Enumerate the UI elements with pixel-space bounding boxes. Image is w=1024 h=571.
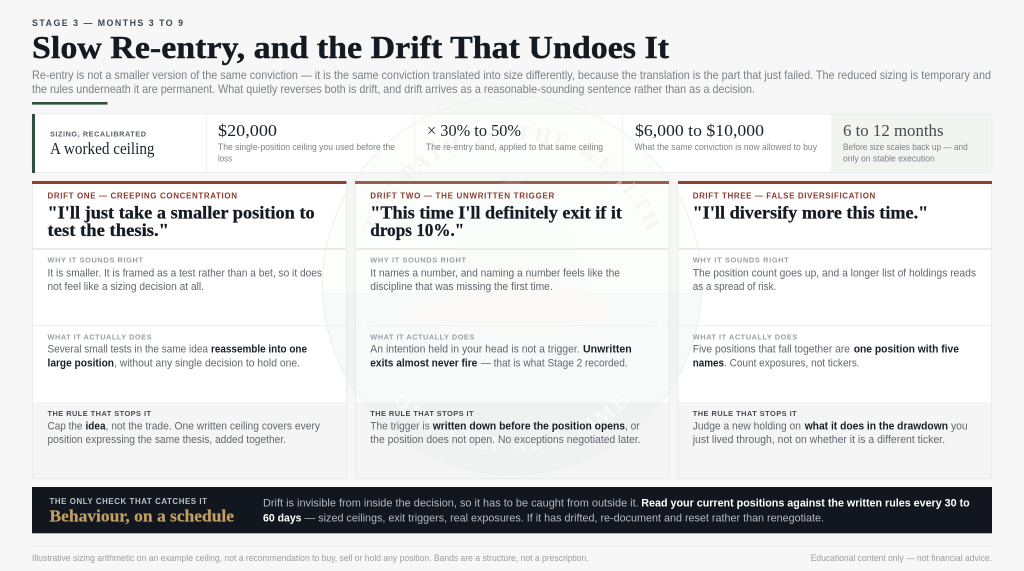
what it actually does: one position with five (854, 344, 959, 356)
the rule that stops it: what it does in the drawdown (804, 420, 948, 432)
watermark seal: ONE STEP AT A TIME (389, 387, 635, 457)
card quote: test the thesis." (48, 220, 169, 240)
panel: drift one (48, 192, 322, 446)
cell: duration: only on stable execution (843, 152, 935, 164)
cell: allowed size: What the same conviction is now allowed to buy (634, 141, 817, 152)
what it actually does: WHAT IT ACTUALLY DOES (370, 332, 474, 341)
card label: DRIFT TWO — THE UNWRITTEN TRIGGER (370, 192, 555, 201)
what it actually does (370, 332, 632, 370)
the rule that stops it (692, 409, 968, 446)
what it actually does: — that is what Stage 2 recorded. (481, 358, 628, 370)
cell: re-entry band (426, 121, 603, 152)
what it actually does: exits almost never fire (370, 358, 477, 370)
why it sounds right: The position count goes up, and a longer list of holdings reads (693, 268, 976, 280)
card quote: "I'll diversify more this time." (693, 203, 928, 223)
the rule that stops it: The trigger is (370, 420, 430, 432)
header (32, 18, 991, 96)
card quote: drops 10%." (370, 220, 464, 240)
why it sounds right: WHY IT SOUNDS RIGHT (693, 256, 789, 265)
callout text: Read your current positions against the written rules every 30 to (641, 498, 970, 510)
cell label: A worked ceiling (50, 139, 155, 158)
the rule that stops it: THE RULE THAT STOPS IT (48, 409, 151, 418)
cell: duration: 6 to 12 months (843, 121, 944, 140)
card quote (48, 203, 315, 240)
the rule that stops it: THE RULE THAT STOPS IT (370, 409, 474, 418)
why it sounds right (370, 256, 620, 293)
the rule that stops it: just lived through, not on whether it is a different ticker. (692, 434, 945, 446)
what it actually does: Several small tests in the same idea (48, 344, 209, 356)
educational note: Educational content only — not financial advice. (811, 553, 992, 563)
cell: prior ceiling (218, 121, 395, 164)
callout: behaviour on a schedule (32, 487, 992, 533)
panel: drift two (370, 192, 641, 446)
why it sounds right: WHY IT SOUNDS RIGHT (48, 256, 143, 265)
why it sounds right: It is smaller. It is framed as a test rather than a bet, so it does (48, 268, 322, 280)
card quote: "I'll just take a smaller position to (48, 203, 315, 223)
subtitle (32, 68, 991, 96)
disclaimer: Illustrative sizing arithmetic on an example ceiling, not a recommendation to buy, sell or hold any position. Bands are a structure, not a prescription. (32, 553, 589, 563)
what it actually does: large position (48, 358, 114, 370)
the rule that stops it (48, 409, 320, 446)
the rule that stops it: written down before the position opens (432, 420, 625, 432)
the rule that stops it: Judge a new holding on (693, 420, 801, 432)
cell: duration: Before size scales back up — and (843, 141, 968, 152)
watermark seal (322, 96, 702, 402)
panel: worked ceiling strip backgrounds (32, 114, 992, 173)
callout text: — sized ceilings, exit triggers, real exposures. If it has drifted, re-document and reset rather than renegotiate. (304, 513, 824, 525)
cell: allowed size (634, 121, 817, 152)
what it actually does: WHAT IT ACTUALLY DOES (693, 332, 797, 341)
why it sounds right: not feel like a sizing decision at all. (48, 281, 204, 293)
cell label (50, 130, 155, 158)
the rule that stops it: you (951, 420, 968, 432)
card label: DRIFT THREE — FALSE DIVERSIFICATION (693, 192, 876, 201)
why it sounds right (48, 256, 322, 293)
the rule that stops it: the position does not open. No exceptions negotiated later. (370, 434, 641, 446)
what it actually does: reassemble into one (211, 344, 307, 356)
callout heading (50, 497, 234, 525)
the rule that stops it: Cap the (48, 420, 82, 432)
panel: sizing, recalibrated (50, 121, 968, 164)
callout heading: Behaviour, on a schedule (50, 506, 234, 525)
cell: prior ceiling: loss (218, 152, 232, 164)
the rule that stops it: idea (86, 420, 106, 432)
footer (32, 553, 992, 563)
callout text (263, 498, 970, 525)
the rule that stops it: THE RULE THAT STOPS IT (693, 409, 797, 418)
what it actually does (693, 332, 959, 370)
cell: re-entry band: The re-entry band, applied to that same ceiling (426, 141, 603, 152)
the rule that stops it (370, 409, 641, 446)
the rule that stops it: , not the trade. One written ceiling covers every (106, 420, 320, 432)
what it actually does: , without any single decision to hold one. (114, 358, 300, 370)
what it actually does: Unwritten (583, 344, 632, 356)
callout heading: THE ONLY CHECK THAT CATCHES IT (50, 497, 207, 506)
why it sounds right: It names a number, and naming a number feels like the (370, 268, 620, 280)
panel: drift cards backgrounds (32, 181, 992, 478)
why it sounds right: as a spread of risk. (693, 281, 776, 293)
cell: duration (843, 121, 968, 164)
subtitle: the rules underneath it are permanent. What quietly reverses both is drift, and drift arrives as a reasonable-sounding sentence rather than as a decision. (32, 82, 755, 96)
callout text: Drift is invisible from inside the decision, so it has to be caught from outside it. (263, 498, 639, 510)
what it actually does: An intention held in your head is not a trigger. (370, 344, 580, 356)
cell: re-entry band: × 30% to 50% (427, 121, 521, 140)
title: Slow Re-entry, and the Drift That Undoes It (32, 29, 669, 65)
what it actually does: Five positions that fall together are (693, 344, 850, 356)
panel: drift three (692, 192, 976, 446)
what it actually does (48, 332, 307, 370)
the rule that stops it: position expressing the same thesis, added together. (48, 434, 286, 446)
cell: allowed size: $6,000 to $10,000 (635, 121, 764, 140)
what it actually does: names (693, 358, 724, 370)
the rule that stops it: , or (625, 420, 640, 432)
callout text: 60 days (263, 513, 302, 525)
cell label: SIZING, RECALIBRATED (50, 130, 146, 138)
why it sounds right (693, 256, 976, 293)
cell: prior ceiling: $20,000 (218, 121, 277, 140)
why it sounds right: WHY IT SOUNDS RIGHT (370, 256, 466, 265)
card quote: "This time I'll definitely exit if it (370, 203, 622, 223)
card quote (370, 203, 622, 240)
eyebrow: STAGE 3 — MONTHS 3 TO 9 (32, 18, 183, 28)
what it actually does: WHAT IT ACTUALLY DOES (48, 332, 152, 341)
watermark seal: THE PATH TO THE WEALTH (388, 181, 636, 184)
card label: DRIFT ONE — CREEPING CONCENTRATION (48, 192, 237, 201)
why it sounds right: discipline that was missing the first time. (370, 281, 553, 293)
what it actually does: . Count exposures, not tickers. (724, 358, 860, 370)
cell: prior ceiling: The single-position ceiling you used before the (218, 141, 395, 152)
